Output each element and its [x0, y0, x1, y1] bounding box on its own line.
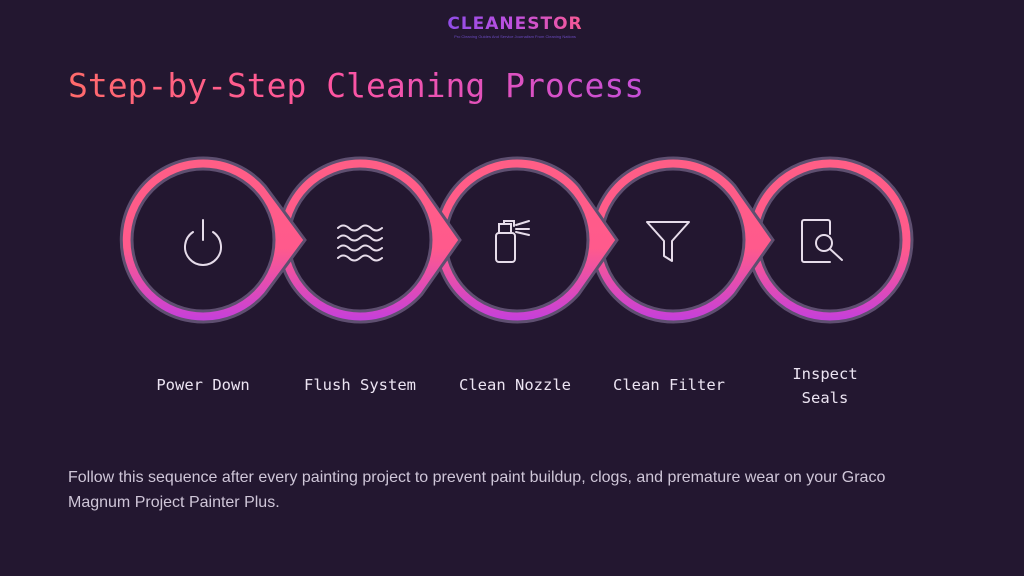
step 1 ring with arrow [121, 158, 305, 322]
title: Step-by-Step Cleaning Process [68, 66, 644, 105]
icon: inspect [802, 220, 842, 262]
icon: waves [338, 226, 382, 260]
label: Inspect Seals: Seals [802, 389, 848, 407]
step 5 ring [748, 158, 912, 322]
label: Clean Nozzle: Clean Nozzle [459, 376, 571, 394]
step 2 ring with arrow [278, 158, 460, 322]
label: Clean Filter: Clean Filter [613, 376, 725, 394]
icon: power [185, 220, 221, 265]
icon: funnel [647, 222, 689, 261]
logo: Pro Cleaning Guides And Service Journalism From Cleaning Nations [454, 34, 576, 39]
label: Power Down: Power Down [156, 376, 250, 394]
step 3 ring with arrow [435, 158, 617, 322]
step 4 ring with arrow [591, 158, 773, 322]
label: Inspect Seals: Inspect [792, 365, 858, 383]
label: Flush System: Flush System [304, 376, 416, 394]
icon: spray bottle [496, 221, 529, 262]
logo: CLEANESTOR [447, 14, 583, 34]
label: Inspect Seals [792, 365, 858, 407]
description text: Follow this sequence after every painting project to prevent paint buildup, clogs, and premature wear on your Graco Magnum Project Painter Plus. [68, 469, 885, 511]
